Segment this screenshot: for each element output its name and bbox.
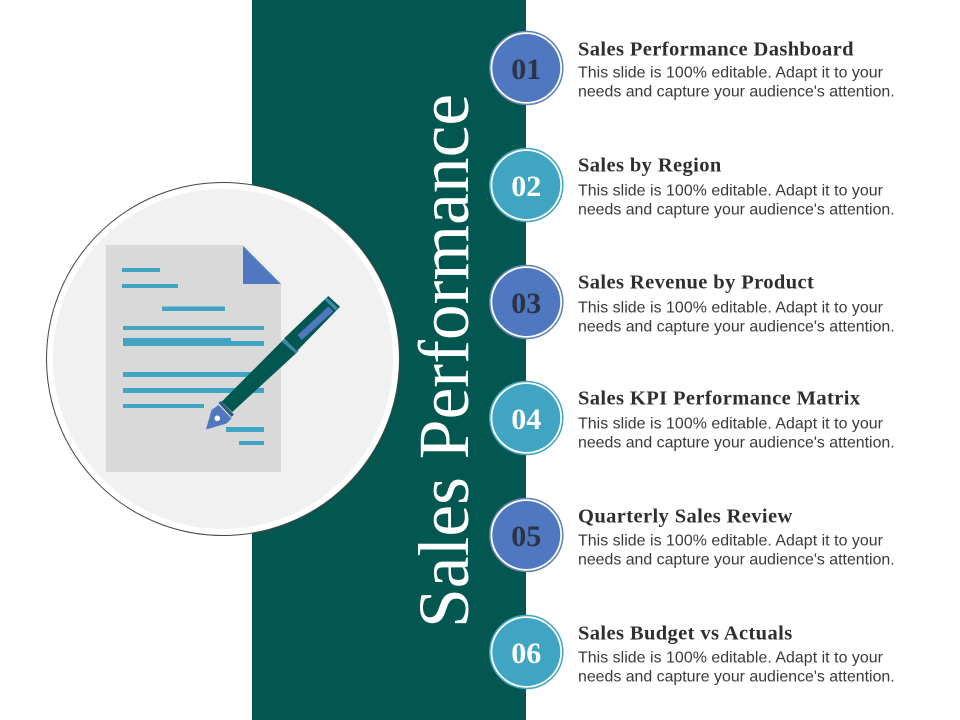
item heading 06: Sales Budget vs Actuals bbox=[578, 622, 793, 644]
item 03 bbox=[490, 266, 895, 338]
item heading 03: Sales Revenue by Product bbox=[578, 272, 814, 294]
number badge 02 bbox=[490, 148, 563, 222]
item 02 bbox=[490, 148, 895, 222]
title: Sales Performance bbox=[405, 94, 484, 628]
number badge 05: 05 bbox=[511, 520, 541, 553]
item 01 bbox=[490, 32, 895, 104]
item heading 04: Sales KPI Performance Matrix bbox=[578, 388, 861, 410]
number badge 01 bbox=[490, 32, 563, 104]
item body 01: needs and capture your audience's attention. bbox=[578, 84, 895, 100]
number badge 04: 04 bbox=[511, 403, 541, 436]
item body 03: This slide is 100% editable. Adapt it to your bbox=[578, 300, 884, 316]
number badge 03 bbox=[490, 266, 563, 338]
item body 02: This slide is 100% editable. Adapt it to your bbox=[578, 182, 884, 200]
number badge 01: 01 bbox=[511, 53, 541, 86]
item 06 bbox=[490, 616, 895, 688]
number badge 03: 03 bbox=[511, 287, 541, 320]
item body 02: needs and capture your audience's attention. bbox=[578, 202, 895, 218]
item body 05: needs and capture your audience's attention. bbox=[578, 552, 895, 568]
number badge 06: 06 bbox=[511, 637, 541, 670]
icon: fountain pen bbox=[206, 296, 340, 430]
item 05 bbox=[490, 498, 895, 572]
item body 01: This slide is 100% editable. Adapt it to your bbox=[578, 64, 884, 82]
item body 06: This slide is 100% editable. Adapt it to your bbox=[578, 650, 884, 666]
item heading 05: Quarterly Sales Review bbox=[578, 506, 793, 528]
number badge 06 bbox=[490, 616, 563, 688]
item heading 02: Sales by Region bbox=[578, 154, 722, 176]
item body 04: needs and capture your audience's attention. bbox=[578, 434, 895, 452]
item body 06: needs and capture your audience's attention. bbox=[578, 668, 895, 686]
illustration: document and pen in circle bbox=[46, 182, 400, 536]
icon: document page bbox=[106, 245, 281, 472]
item body 03: needs and capture your audience's attention. bbox=[578, 318, 895, 336]
item body 04: This slide is 100% editable. Adapt it to your bbox=[578, 416, 884, 432]
number badge 04 bbox=[490, 382, 563, 454]
item 04 bbox=[490, 382, 895, 454]
number badge 02: 02 bbox=[511, 170, 541, 203]
item heading 01: Sales Performance Dashboard bbox=[578, 38, 854, 60]
item body 05: This slide is 100% editable. Adapt it to your bbox=[578, 532, 884, 550]
number badge 05 bbox=[490, 498, 563, 572]
panel: green vertical band bbox=[252, 0, 526, 720]
